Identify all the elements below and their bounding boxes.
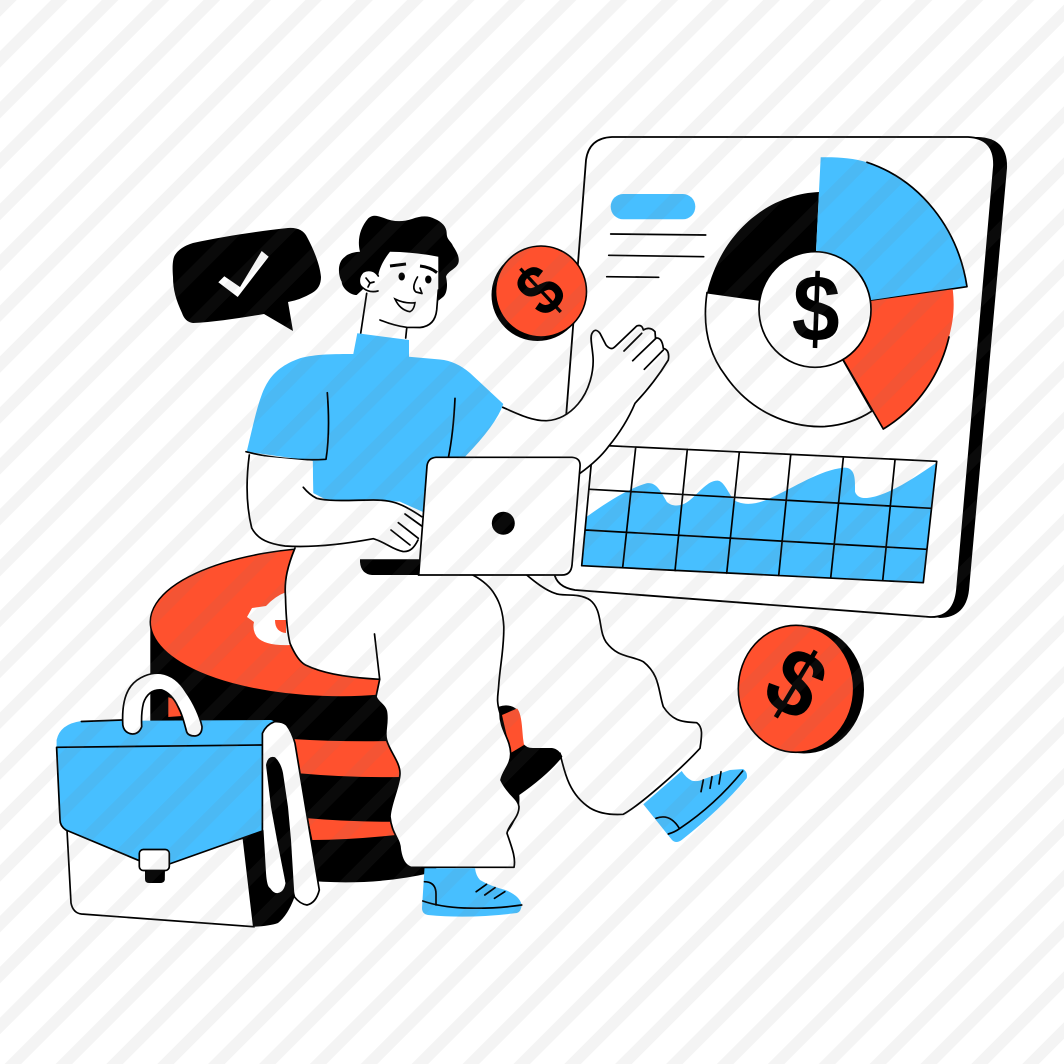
board shadow — [900, 137, 1007, 618]
board face — [554, 137, 994, 617]
shirt — [246, 333, 503, 520]
white coin symbol — [247, 592, 290, 645]
briefcase — [57, 673, 319, 927]
ear — [359, 270, 378, 292]
blue ring segment — [816, 157, 967, 301]
white ring segment — [705, 293, 872, 427]
trouser: extended leg — [500, 575, 702, 814]
ring centre — [759, 252, 871, 367]
stripe one — [292, 739, 402, 777]
arm: raised arm and hand — [440, 326, 669, 473]
shoe: standing foot — [422, 868, 522, 917]
neck and face — [361, 252, 438, 340]
cylinder: stacked coin pile — [150, 547, 500, 882]
laptop logo dot — [492, 512, 515, 535]
black ring segment — [707, 192, 819, 300]
coin: lower dollar coin — [738, 625, 864, 754]
area fill — [582, 463, 936, 583]
case flap — [57, 720, 276, 864]
panel: dashboard board — [554, 137, 1007, 618]
laptop — [360, 457, 580, 575]
clasp — [139, 850, 169, 883]
blue heading pill — [611, 194, 695, 219]
mouth — [395, 299, 415, 312]
fingers — [624, 333, 663, 369]
coin: lower dollar coin: $ — [748, 626, 844, 742]
symbol counter — [275, 620, 286, 633]
stack top — [150, 547, 400, 697]
ring chart — [705, 157, 967, 429]
stripe three behind handle — [168, 697, 182, 717]
chart grid — [582, 445, 937, 583]
lower strap loop — [263, 825, 286, 893]
hair — [339, 216, 459, 301]
case side — [243, 826, 294, 927]
text lines — [607, 234, 706, 277]
side strap — [262, 722, 319, 905]
stripe two — [308, 818, 396, 840]
cloth: pile edge behind leg — [495, 705, 562, 833]
check mark — [218, 251, 269, 297]
shirt seams — [246, 393, 455, 460]
character head — [339, 216, 459, 340]
dollar sign: $ — [790, 255, 842, 363]
shoe: raised foot — [643, 769, 747, 842]
coin: top dollar coin: $ — [500, 249, 581, 332]
arm: resting arm on laptop — [247, 455, 425, 552]
nose — [414, 277, 422, 294]
stack body — [150, 620, 500, 882]
area chart — [582, 445, 937, 583]
eyebrows — [390, 264, 437, 273]
handle — [123, 673, 202, 736]
trouser: seated leg — [285, 540, 519, 867]
case body — [67, 830, 254, 927]
speech bubble with check mark — [173, 228, 321, 331]
strap slot — [266, 757, 294, 897]
laptop lid — [419, 457, 580, 575]
laptop base — [360, 559, 422, 575]
orange ring segment — [843, 289, 954, 429]
fingers — [391, 514, 422, 545]
eyes — [398, 272, 431, 284]
